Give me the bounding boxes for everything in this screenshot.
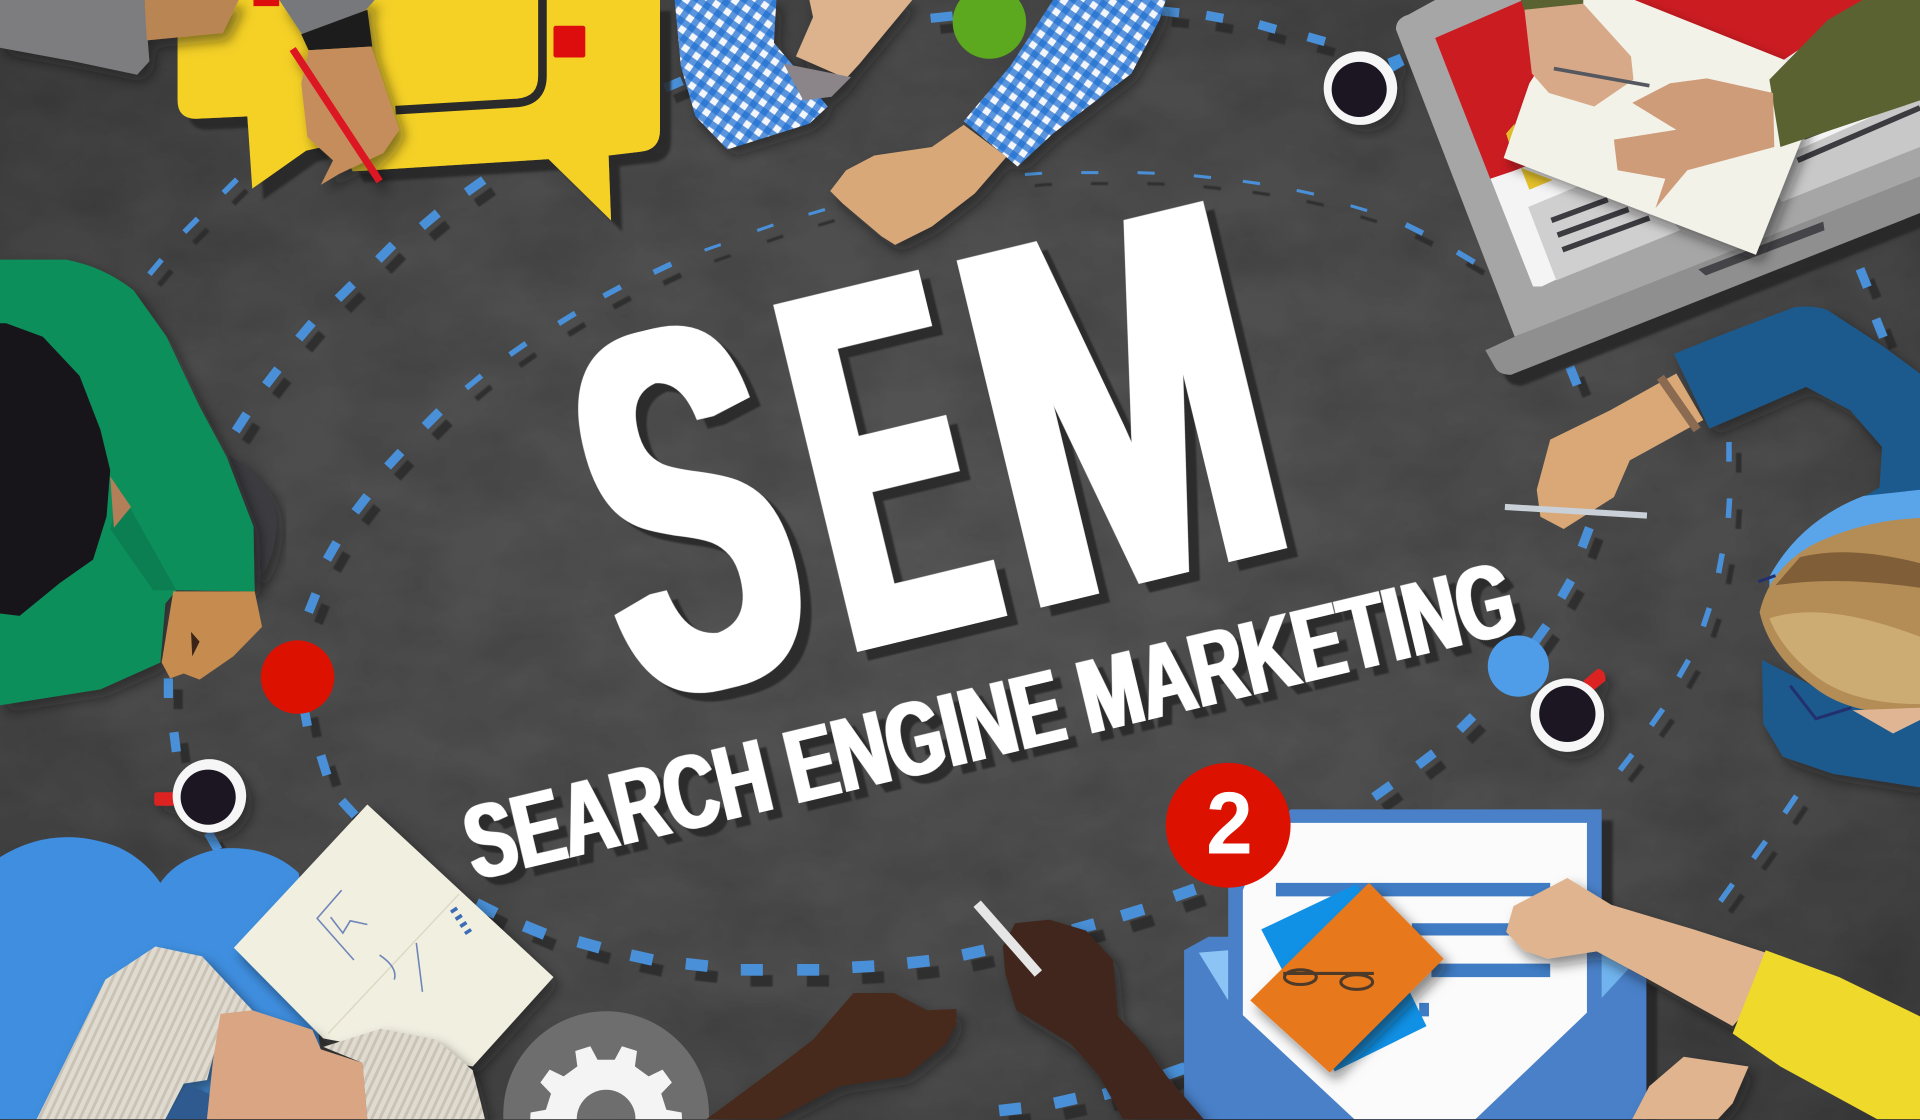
person: yellow sleeve arm xyxy=(1506,878,1920,1119)
olive sleeves xyxy=(1521,0,1920,147)
person: green sweater with dark hair xyxy=(0,260,277,705)
person: checked shirt arms xyxy=(675,0,1166,245)
notification badge: 2 xyxy=(1166,763,1291,888)
icon: red circle xyxy=(261,640,334,714)
hands with pen xyxy=(1524,4,1774,208)
speech bubble icon: yellow xyxy=(178,0,660,220)
phone under the elbow xyxy=(229,456,277,585)
icon: coffee cup right xyxy=(1531,669,1605,752)
sketch paper xyxy=(1504,0,1802,255)
icon: cloud blue xyxy=(0,837,321,1119)
icon: coffee cup top xyxy=(1324,51,1404,125)
person: blue sweater with pen xyxy=(1505,307,1920,529)
reading glasses xyxy=(1283,970,1374,989)
notification badge: 2: 2 xyxy=(1206,773,1253,872)
person: cream sweater with clasped hands xyxy=(37,947,485,1119)
person: top-left sleeve and writing hand xyxy=(0,0,399,185)
icon: blue circle xyxy=(1488,636,1549,697)
blue book xyxy=(1261,884,1427,1071)
icon: green circle xyxy=(953,0,1026,59)
title: SEM xyxy=(505,125,1371,737)
laptop with paper and hands xyxy=(1396,0,1920,375)
person: blonde with blue top xyxy=(1758,490,1920,787)
person: dark hands with chalk xyxy=(707,904,1204,1119)
icon: gear circle xyxy=(503,1011,709,1119)
orange book xyxy=(1250,883,1444,1073)
icon: coffee cup left xyxy=(154,759,246,833)
envelope with letter and orange book xyxy=(1184,809,1646,1119)
notebook with sketches xyxy=(234,804,553,1067)
